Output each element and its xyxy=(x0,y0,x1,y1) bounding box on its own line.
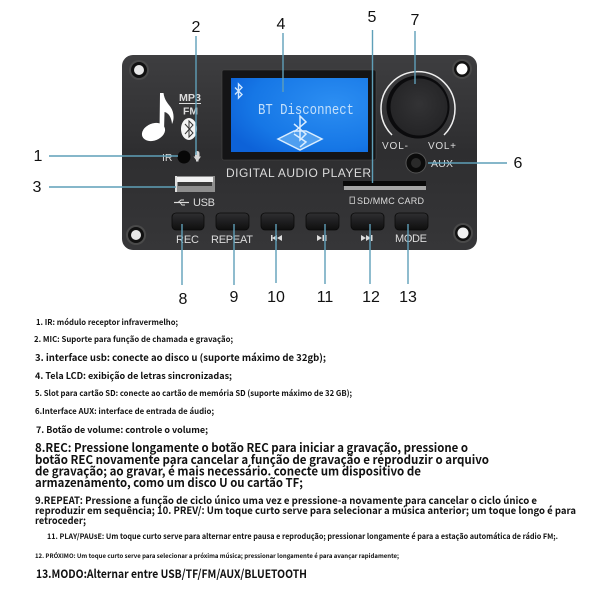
item 13: 13.MODO:Alternar entre USB/TF/FM/AUX/BLUETOOTH xyxy=(36,566,307,582)
logo: MP3 FM: FM xyxy=(183,106,198,118)
item 3: 3. interface usb: conecte ao disco u (suporte máximo de 32gb); xyxy=(35,350,326,364)
callout numbers: 7 xyxy=(411,12,420,29)
button labels xyxy=(176,233,427,246)
button labels: REC xyxy=(176,234,199,246)
LCD screen xyxy=(222,70,376,160)
logo: MP3 FM: MP3 xyxy=(179,93,201,104)
callout leader lines xyxy=(49,30,507,285)
items 9 and 10: reproduzir em sequência; 10. PREV/: Um toque curto serve para selecionar a música anterior; um toque longo é para xyxy=(35,502,576,517)
icon: microphone xyxy=(194,151,201,162)
callout numbers: 4 xyxy=(277,16,286,33)
item 8: botão REC novamente para cancelar a função de gravação e reproduzir o arquivo xyxy=(35,451,489,468)
button labels: REPEAT xyxy=(211,234,253,246)
item 6: 6.Interface AUX: interface de entrada de áudio; xyxy=(35,406,214,417)
callout numbers: 13 xyxy=(399,289,417,306)
mounting holes xyxy=(126,59,473,245)
icon: music note xyxy=(139,93,174,144)
callout numbers: 10 xyxy=(267,289,285,306)
USB port xyxy=(175,176,215,192)
callout numbers: 9 xyxy=(230,289,239,306)
callout numbers xyxy=(33,9,523,308)
AUX jack xyxy=(406,153,453,173)
item 8: 8.REC: Pressione longamente o botão REC para iniciar a gravação, pressione o xyxy=(35,439,468,456)
SD card slot xyxy=(343,181,426,190)
items 9 and 10: retroceder; xyxy=(35,512,86,527)
callout numbers: 6 xyxy=(514,155,523,172)
AUX jack: AUX xyxy=(431,158,453,170)
item 8: armazenamento, como um disco U ou cartão TF; xyxy=(35,474,303,491)
items 9 and 10 xyxy=(35,492,576,527)
heading: digital audio player: DIGITAL AUDIO PLAYER xyxy=(226,166,371,180)
audio player module panel xyxy=(122,55,477,250)
item 4: 4. Tela LCD: exibição de letras sincronizadas; xyxy=(35,369,232,382)
IR receiver: IR xyxy=(162,152,173,164)
item 1: 1. IR: módulo receptor infravermelho; xyxy=(36,317,178,328)
item 11: 11. PLAY/PAUsE: Um toque curto serve para alternar entre pausa e reprodução; pressionar longamente é para a estação automática de rádio FM;. xyxy=(47,531,558,542)
callout numbers: 2 xyxy=(192,19,201,36)
item 8 xyxy=(35,439,489,491)
icon: bluetooth small xyxy=(235,84,242,98)
IR receiver xyxy=(162,150,190,164)
SD label: SD/MMC CARD xyxy=(357,196,424,206)
volume knob: VOL- xyxy=(382,141,408,152)
volume knob: VOL+ xyxy=(428,141,456,152)
button labels: MODE xyxy=(395,233,427,245)
buttons xyxy=(172,213,428,230)
feature descriptions xyxy=(34,317,576,582)
USB label xyxy=(174,197,215,209)
callout numbers: 8 xyxy=(179,291,188,308)
USB label: USB xyxy=(193,197,215,209)
volume knob xyxy=(381,72,456,152)
items 9 and 10: 9.REPEAT: Pressione a função de ciclo único uma vez e pressione-a novamente para cancelar o ciclo único e xyxy=(35,492,537,507)
callout numbers: 3 xyxy=(33,179,42,196)
logo: MP3 FM xyxy=(179,93,201,118)
callout numbers: 11 xyxy=(317,289,333,306)
callout numbers: 1 xyxy=(34,148,43,165)
icon: bluetooth badge xyxy=(181,118,197,140)
item 7: 7. Botão de volume: controle o volume; xyxy=(36,423,208,436)
panel board xyxy=(122,55,477,250)
item 12: 12. PRÓXIMO: Um toque curto serve para selecionar a próxima música; pressionar longamente é para avançar rapidamente; xyxy=(35,551,399,560)
icon: bluetooth diamond xyxy=(278,116,322,150)
callout numbers: 12 xyxy=(362,289,380,306)
item 2: 2. MIC: Suporte para função de chamada e gravação; xyxy=(34,334,233,345)
item 5: 5. Slot para cartão SD: conecte ao cartão de memória SD (suporte máximo de 32 GB); xyxy=(35,388,352,399)
item 8: de gravação; ao gravar, é mais necessário. conecte um dispositivo de xyxy=(35,462,421,480)
screen text: BT Disconnect xyxy=(258,102,354,119)
callout numbers: 5 xyxy=(368,9,377,26)
